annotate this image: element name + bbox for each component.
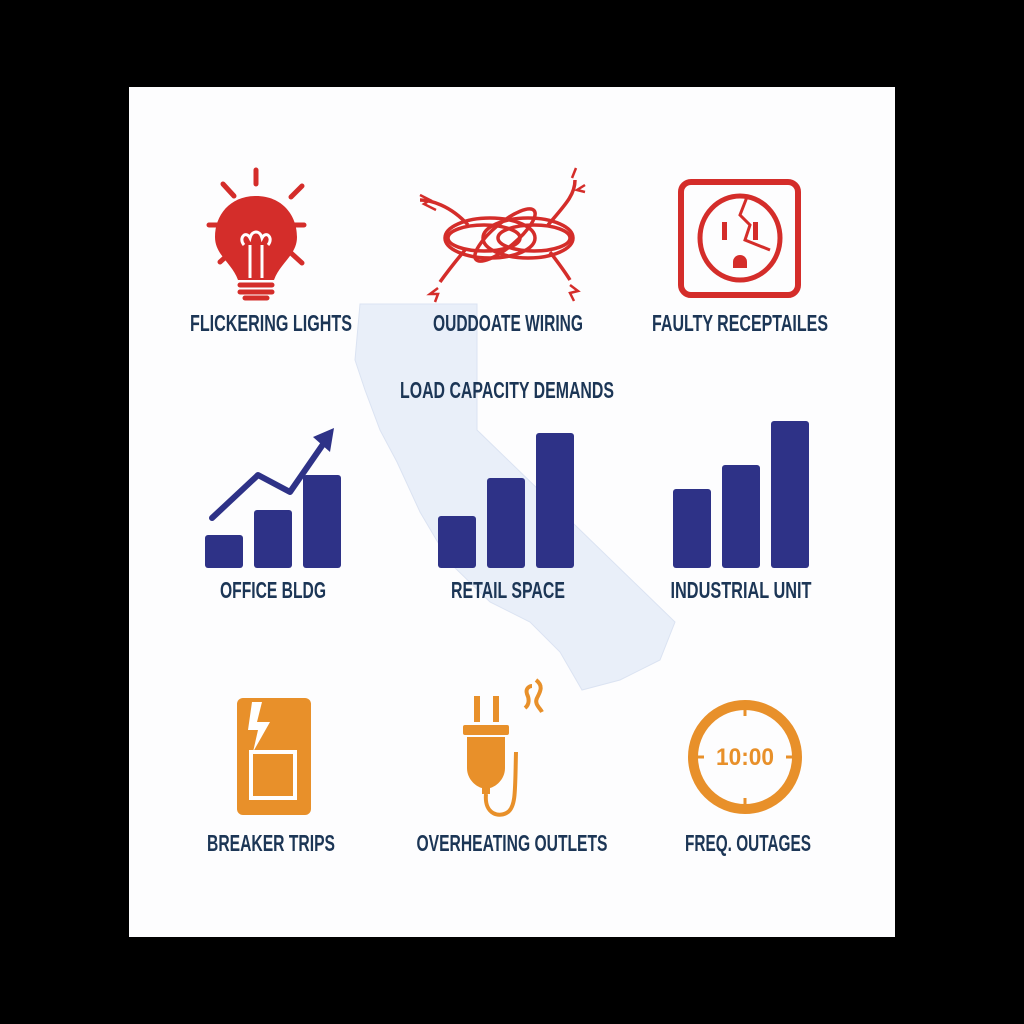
label: faulty receptacles: FAULTY RECEPTAILES [652, 310, 828, 336]
icon: breaker [237, 698, 311, 815]
chart: industrial unit [673, 421, 809, 568]
label: office bldg: OFFICE BLDG [220, 577, 326, 603]
chart: retail space [438, 433, 574, 568]
label: outdated wiring: OUDDOATE WIRING [433, 310, 583, 336]
icon: clock outage: 10:00 [716, 744, 774, 771]
label: industrial unit: INDUSTRIAL UNIT [670, 577, 812, 603]
chart: office bldg [205, 428, 341, 568]
label: flickering lights: FLICKERING LIGHTS [190, 310, 352, 336]
heading: load capacity demands: LOAD CAPACITY DEMANDS [400, 377, 614, 403]
map: california [355, 304, 675, 690]
label: retail space: RETAIL SPACE [451, 577, 565, 603]
label: freq outages: FREQ. OUTAGES [685, 830, 811, 856]
icon: clock outage [693, 705, 797, 809]
icon: flickering light bulb [209, 170, 304, 298]
icon: overheating plug [463, 680, 542, 815]
label: breaker trips: BREAKER TRIPS [207, 830, 335, 856]
icon: faulty receptacle [681, 182, 798, 295]
panel: white background [129, 87, 895, 937]
icon: tangled wiring [420, 168, 585, 302]
label: overheating outlets: OVERHEATING OUTLETS [416, 830, 608, 856]
